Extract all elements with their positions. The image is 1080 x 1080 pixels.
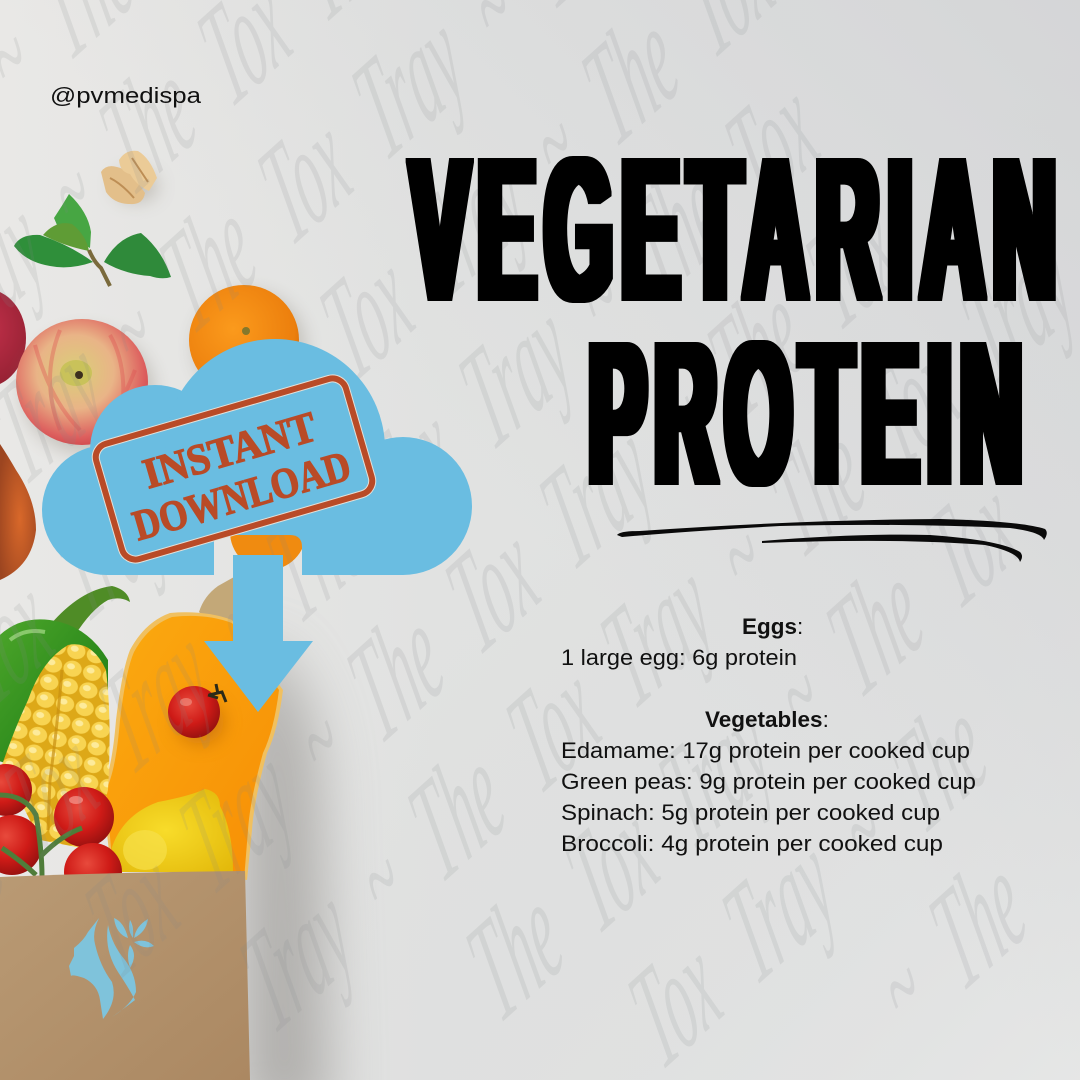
text block: eggs: 1 large egg: 6g protein [561,645,797,670]
watermark: The Tox Tray script pattern: Tox Tray ~ The Tox Tray ~ The Tox [68,161,917,1010]
icon: download cloud [42,339,472,712]
text block: vegetables: Vegetables: [705,707,829,732]
watermark: The Tox Tray script pattern: ~ The [858,818,1044,1070]
text block: eggs: Eggs: [742,614,803,639]
text block: vegetables: Green peas: 9g protein per cooked cup [561,769,976,794]
icon: face logo on bag [69,918,154,1019]
icon: paper bag [0,871,250,1080]
icon: corn [2,644,110,850]
text block: eggs [561,614,803,670]
watermark: The Tox Tray script pattern: Tray ~ The Tox Tray ~ The Tox Tray [223,197,1080,1064]
icon: tomatoes on the vine [0,764,122,901]
handle: @pvmedispa [50,83,202,108]
icon: cherry tomato on squash [168,684,226,744]
text block: vegetables [561,707,976,856]
soft shadow beside bag and squash [240,650,330,1080]
food photo illustration [0,151,330,1080]
watermark: The Tox Tray script pattern: The Tox Tray ~ The Tox [449,440,1036,1053]
arrow [204,555,313,712]
text block: vegetables: Spinach: 5g protein per cooked cup [561,800,940,825]
icon: orange [189,285,305,402]
icon: walnut [101,151,158,204]
icon: mint leaves [14,194,171,286]
text block: vegetables: Edamame: 17g protein per cooked cup [561,738,970,763]
icon: orange behind cloud [230,494,306,570]
stamp: instant download [92,375,376,563]
stamp: instant download: DOWNLOAD [128,443,356,550]
title [411,116,1065,526]
icon: onion [0,444,36,580]
brush underline [617,519,1047,562]
icon: lemon [111,789,233,872]
stamp: instant download: INSTANT [138,403,322,498]
text block: vegetables: Broccoli: 4g protein per cooked cup [561,831,943,856]
icon: green pepper [0,586,130,770]
icon: red apple [0,289,26,387]
icon: butternut squash [102,577,283,880]
icon: apple [16,319,154,454]
